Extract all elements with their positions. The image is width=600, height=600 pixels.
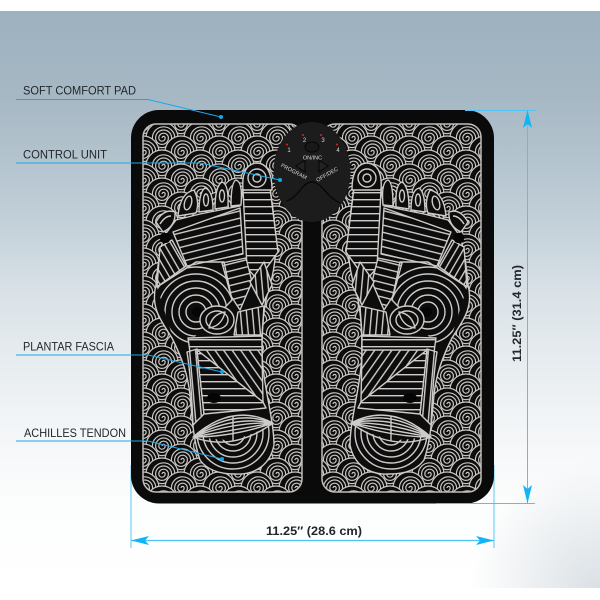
callout: achilles tendon: ACHILLES TENDON [24, 426, 126, 440]
control unit: OFF/DEC [316, 166, 339, 184]
dimension extension lines behind pad [131, 465, 494, 548]
control unit: 4 [336, 148, 340, 154]
left panel [143, 124, 302, 492]
control unit: PROGRAM [279, 163, 308, 181]
control unit: ON/INC [303, 156, 322, 162]
callout: control unit [16, 148, 282, 182]
width label: 11.25″ (28.6 cm) [266, 526, 362, 538]
pad base [131, 110, 494, 504]
right panel [322, 124, 481, 492]
callout: soft comfort pad: SOFT COMFORT PAD [23, 84, 136, 98]
height dimension arrow [436, 110, 536, 504]
massage pad [131, 110, 494, 504]
callout: plantar fascia [16, 340, 224, 374]
callout: soft comfort pad [16, 84, 223, 119]
left foot zones [151, 163, 278, 474]
control unit: 3 [321, 138, 325, 144]
callout: achilles tendon [16, 426, 224, 461]
control unit [274, 122, 350, 222]
control unit: 2 [303, 138, 307, 144]
callout: plantar fascia: PLANTAR FASCIA [23, 340, 114, 354]
width dimension arrow [131, 536, 494, 545]
control unit: 1 [287, 148, 291, 154]
callout: control unit: CONTROL UNIT [23, 148, 108, 162]
right foot zones [346, 163, 473, 474]
height label: 11.25″ (31.4 cm) [512, 265, 524, 362]
